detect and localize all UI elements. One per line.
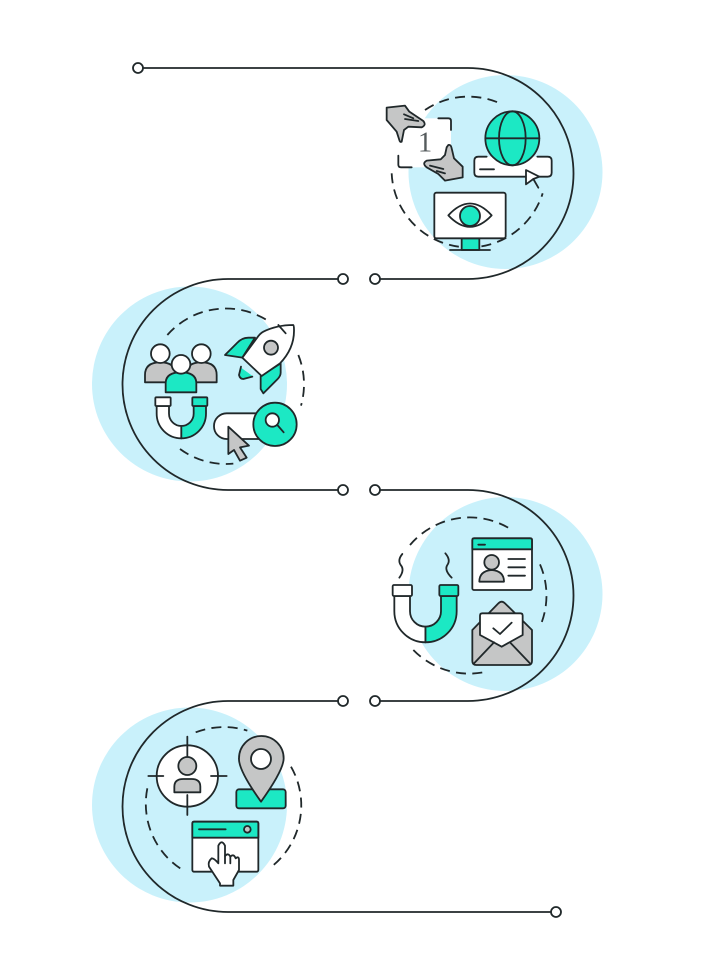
panel: step 2 icons [145,309,304,464]
panel: step 1 icons [387,97,552,250]
dashed ring [410,517,546,674]
panel: step 3 icons [393,517,546,674]
icon: open envelope with check [472,602,532,665]
panel: step 4 icons [146,727,301,886]
timeline connector [123,63,574,917]
icon: targeted person [148,737,227,815]
icon: profile window [472,538,532,590]
panel: step 3 blue disc [408,497,602,691]
icon: rocket [225,325,294,393]
dashed ring [167,309,304,464]
panel: step 2 blue disc [92,286,287,482]
dashed ring [392,97,543,247]
icon: browser window with pointing hand [192,822,258,886]
dashed ring [146,727,301,870]
icon: monitor with eye [434,193,506,250]
icon: magnet [155,397,207,438]
icon: framing hands with number 1: 1 [418,126,432,158]
icon: group of people [145,344,217,392]
icon: magnet with waves [393,553,458,642]
icon: framing hands with number 1 [387,106,463,181]
panel: step 4 blue disc [92,708,287,902]
icon: location pin [236,736,286,808]
icon: globe with address bar and cursor [474,111,552,188]
panel: step 1 blue disc [408,75,602,269]
icon: search bar with cursor [214,403,297,461]
